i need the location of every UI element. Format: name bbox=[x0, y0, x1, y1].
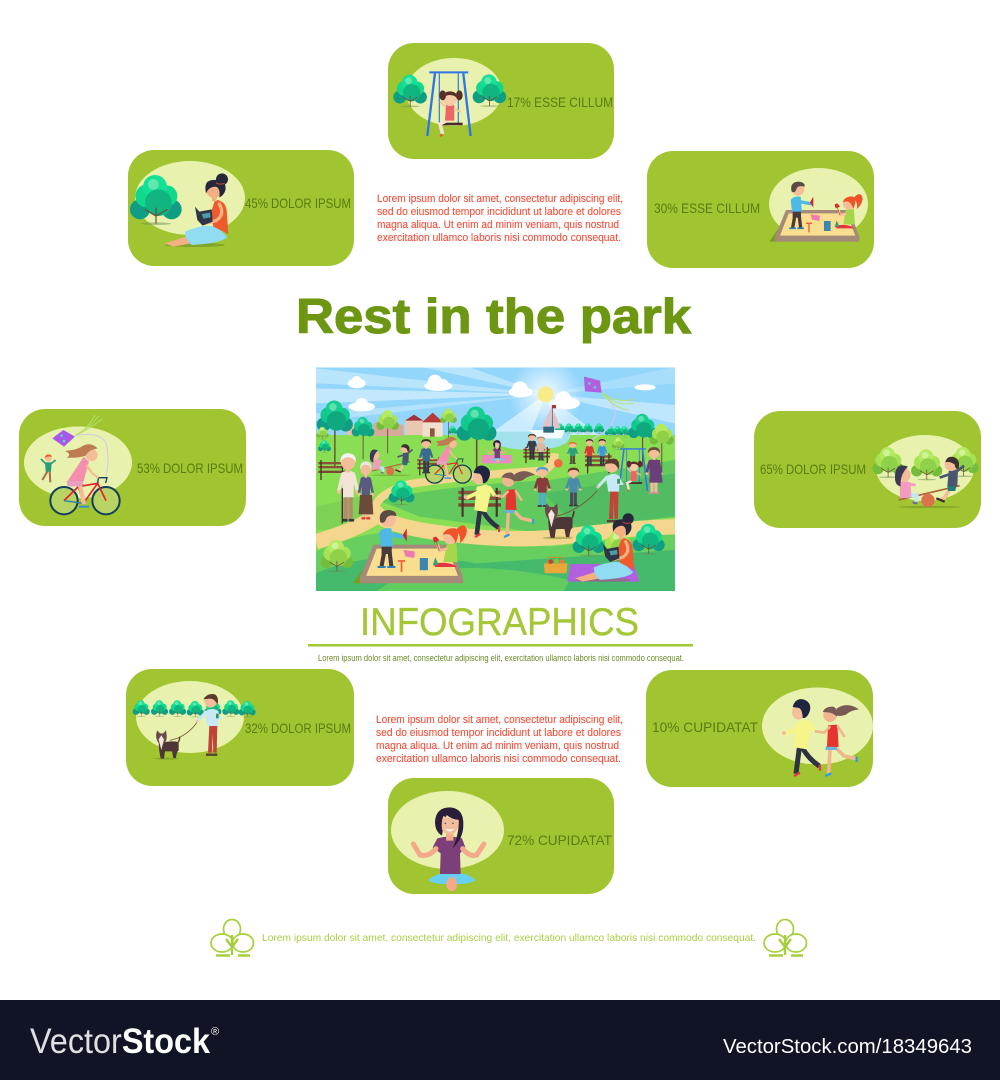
label: 10% cupidatat: 10% CUPIDATAT bbox=[652, 719, 758, 735]
icon: outline tree right bbox=[764, 920, 806, 956]
icon: woman reading bbox=[165, 173, 228, 247]
label: 53% dolor ipsum: 53% DOLOR IPSUM bbox=[137, 460, 243, 476]
red text block bottom: magna aliqua. Ut enim ad minim veniam, quis nostrud bbox=[376, 740, 619, 752]
far tree line bbox=[448, 423, 630, 436]
label: 30% esse cillum: 30% ESSE CILLUM bbox=[654, 200, 760, 216]
icon: sandbox with children bbox=[769, 182, 863, 242]
label: 65% dolor ipsum: 65% DOLOR IPSUM bbox=[760, 461, 866, 477]
seated people bbox=[419, 434, 607, 473]
runners bbox=[464, 466, 535, 537]
kite bbox=[584, 377, 634, 442]
benches bbox=[318, 447, 612, 517]
image id: VectorStock.com/18349643 bbox=[723, 1036, 972, 1058]
icon: girl on bicycle bbox=[50, 444, 120, 514]
woman on bicycle bbox=[426, 437, 471, 483]
clouds bbox=[348, 375, 656, 411]
card: running 10% bbox=[646, 670, 873, 787]
children playing bbox=[534, 459, 582, 507]
card: sandbox 30% bbox=[647, 151, 874, 268]
dog walker and dog bbox=[542, 459, 621, 539]
sand paths bbox=[316, 453, 675, 542]
woman reading on mat bbox=[575, 513, 634, 582]
card: swing 17% bbox=[388, 43, 614, 159]
card: cycling 53% bbox=[19, 409, 246, 526]
watermark bar bbox=[0, 1000, 1000, 1080]
VectorStock logo: VectorStock bbox=[30, 1022, 210, 1061]
icon: bush right bbox=[473, 74, 506, 107]
picnic basket bbox=[544, 557, 567, 573]
icon: running child bbox=[41, 454, 56, 482]
icon: outline tree left bbox=[211, 920, 254, 956]
card: seesaw 65% bbox=[754, 411, 981, 528]
icon: trees bbox=[872, 447, 979, 480]
sandbox with children bbox=[353, 510, 467, 583]
icon: runners bbox=[782, 699, 859, 776]
label: 32% dolor ipsum: 32% DOLOR IPSUM bbox=[245, 720, 351, 736]
yoga figure on mat bbox=[482, 440, 512, 463]
icon: row of bushes bbox=[133, 700, 256, 717]
houses bbox=[347, 413, 443, 437]
icon: children on seesaw bbox=[895, 457, 964, 508]
red text block top: Lorem ipsum dolor sit amet, consectetur adipiscing elit, bbox=[377, 193, 623, 205]
seesaw children bbox=[370, 444, 413, 476]
icon: woman meditating bbox=[413, 807, 484, 891]
icon: bush bbox=[130, 175, 182, 225]
sun bbox=[538, 386, 554, 402]
park scene illustration bbox=[316, 358, 675, 592]
woman with drink bbox=[645, 447, 663, 494]
red text block top bbox=[377, 193, 623, 244]
lawn bbox=[316, 432, 675, 592]
card: reading 45% bbox=[128, 150, 354, 266]
icon: man walking bbox=[196, 694, 220, 755]
title: Rest in the park bbox=[296, 290, 692, 344]
elderly couple bbox=[337, 453, 374, 523]
icon: girl on swing bbox=[427, 72, 471, 136]
purple mat bbox=[567, 564, 639, 582]
red text block top: sed do eiusmod tempor incididunt ut labore et dolores bbox=[377, 206, 622, 218]
footer caption: Lorem ipsum dolor sit amet, consectetur adipiscing elit, exercitation ullamco laboris nisi commodo consequat. bbox=[262, 932, 756, 944]
sky bbox=[316, 367, 675, 444]
sailboat bbox=[528, 405, 565, 438]
red text block bottom bbox=[376, 714, 623, 765]
red text block bottom: Lorem ipsum dolor sit amet, consectetur adipiscing elit, bbox=[376, 714, 623, 726]
icon: dog on leash bbox=[154, 722, 197, 760]
trees bbox=[316, 400, 674, 480]
red text block top: magna aliqua. Ut enim ad minim veniam, quis nostrud bbox=[377, 219, 619, 231]
infographics heading: INFOGRAPHICS bbox=[360, 601, 639, 644]
bush foreground bbox=[320, 480, 665, 572]
swing set bbox=[619, 449, 647, 491]
caption under heading: Lorem ipsum dolor sit amet, consectetur adipiscing elit, exercitation ullamco laboris nisi commodo consequat. bbox=[318, 653, 684, 663]
label: 45% dolor ipsum: 45% DOLOR IPSUM bbox=[245, 195, 351, 211]
red text block bottom: exercitation ullamco laboris nisi commodo consequat. bbox=[376, 753, 621, 765]
red text block bottom: sed do eiusmod tempor incididunt ut labore et dolores bbox=[376, 727, 622, 739]
registered mark: ® bbox=[211, 1026, 219, 1038]
icon: kite bbox=[52, 415, 108, 477]
label: 17% esse cillum: 17% ESSE CILLUM bbox=[507, 94, 613, 110]
label: 72% cupidatat: 72% CUPIDATAT bbox=[507, 832, 612, 848]
red text block top: exercitation ullamco laboris nisi commodo consequat. bbox=[377, 232, 621, 244]
card: yoga 72% bbox=[388, 778, 614, 894]
icon: bush left bbox=[393, 75, 427, 107]
card: dog walking 32% bbox=[126, 669, 354, 786]
